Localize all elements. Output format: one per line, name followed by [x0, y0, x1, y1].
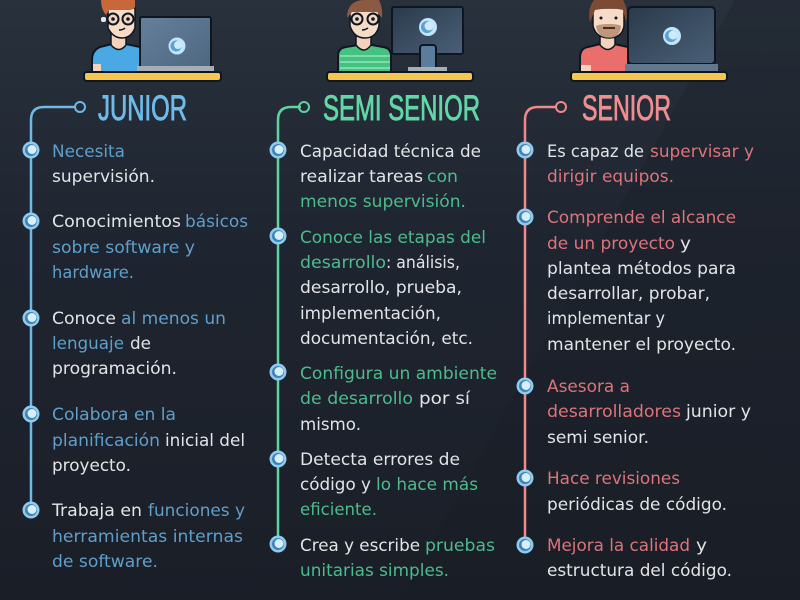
text: semi senior list: documentación, etc. [300, 329, 473, 348]
text: senior list: de un proyecto [547, 234, 675, 253]
text: semi senior list: pruebas [425, 536, 495, 555]
text: junior list: de [130, 334, 151, 353]
text: senior list: Es capaz de [547, 142, 644, 161]
text: senior list: supervisar y [650, 142, 754, 161]
text: senior list: implementar y [547, 309, 665, 328]
heading: junior: JUNIOR [98, 89, 187, 128]
text: semi senior list: menos supervisión. [300, 192, 466, 211]
heading: senior: SENIOR [582, 89, 671, 128]
text: semi senior list: Capacidad técnica de [300, 142, 481, 161]
text: senior list: desarrolladores [547, 402, 681, 421]
text: senior list: Mejora la calidad [547, 536, 690, 555]
timeline: senior [525, 102, 566, 545]
text: junior list: hardware. [52, 263, 134, 282]
timeline: semi senior [278, 102, 309, 544]
text: senior list: plantea métodos para [547, 259, 736, 278]
text: senior list: y [680, 234, 691, 253]
text: semi senior list: : análisis, [386, 253, 460, 272]
text: junior list: al menos un [121, 309, 226, 328]
text: semi senior list: desarrollo [300, 253, 386, 272]
text: semi senior list: lo hace más [376, 475, 478, 494]
text: semi senior list: de desarrollo [300, 389, 413, 408]
text: senior list: desarrollar, probar, [547, 284, 710, 303]
text: senior list: junior y [685, 402, 751, 421]
text: senior list: semi senior. [547, 428, 649, 447]
text: semi senior list: realizar tareas [300, 167, 423, 186]
text: semi senior list: desarrollo, prueba, [300, 278, 462, 297]
text: junior list: supervisión. [52, 167, 155, 186]
heading: semi senior: SEMI SENIOR [323, 89, 480, 128]
text: junior list: inicial del [165, 431, 245, 450]
text: semi senior list: unitarias simples. [300, 561, 449, 580]
text: junior list: programación. [52, 359, 177, 378]
text: senior list: dirigir equipos. [547, 167, 674, 186]
illustration: junior developer at laptop [84, 0, 221, 81]
text: semi senior list: por sí [419, 389, 472, 408]
text: junior list: planificación [52, 431, 160, 450]
text: junior list: funciones y [148, 501, 245, 520]
bullets: junior [22, 142, 40, 518]
text: junior list: de software. [52, 552, 158, 571]
text: semi senior list [300, 142, 497, 580]
text: semi senior list: Detecta errores de [300, 450, 460, 469]
bullets: senior [516, 142, 534, 554]
text: junior list [51, 142, 248, 571]
text: junior list: básicos [185, 212, 248, 231]
text: junior list: Conoce [52, 309, 116, 328]
text: semi senior list: Configura un ambiente [300, 364, 497, 383]
text: semi senior list: Crea y escribe [300, 536, 420, 555]
bullets: semi senior [270, 142, 286, 552]
text: senior list [547, 142, 754, 580]
text: junior list: proyecto. [52, 456, 131, 475]
text: semi senior list: código y [300, 475, 371, 494]
text: senior list: Asesora a [547, 377, 630, 396]
illustration: semi senior developer at monitor [327, 0, 473, 81]
text: senior list: estructura del código. [547, 561, 732, 580]
timeline: junior [31, 102, 85, 510]
text: semi senior list: eficiente. [300, 500, 377, 519]
text: senior list: periódicas de código. [547, 495, 727, 514]
text: junior list: Necesita [52, 142, 125, 161]
text: senior list: Hace revisiones [547, 469, 680, 488]
text: junior list: Conocimientos [52, 212, 181, 231]
text: junior list: herramientas internas [52, 527, 243, 546]
text: semi senior list: mismo. [300, 415, 361, 434]
text: senior list: Comprende el alcance [547, 208, 736, 227]
text: junior list: Trabaja en [51, 501, 142, 520]
text: junior list: Colabora en la [52, 405, 176, 424]
text: senior list: y [696, 536, 707, 555]
text: junior list: lenguaje [52, 334, 124, 353]
illustration: senior developer at laptop [571, 0, 727, 81]
text: semi senior list: implementación, [300, 304, 441, 323]
text: semi senior list: con [427, 167, 458, 186]
text: semi senior list: Conoce las etapas del [300, 228, 486, 247]
text: junior list: sobre software y [52, 238, 195, 257]
text: senior list: mantener el proyecto. [547, 335, 736, 354]
